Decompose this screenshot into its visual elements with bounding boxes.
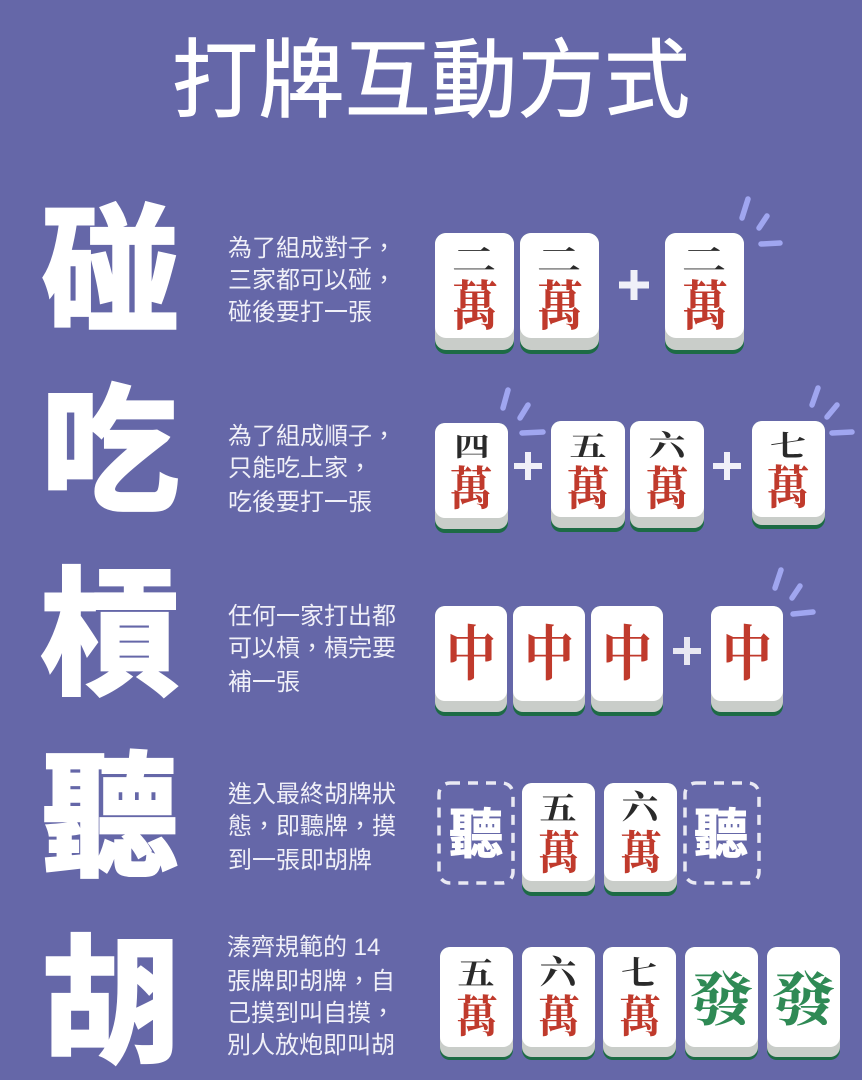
tiles: 胡 example <box>440 947 840 1060</box>
tile: 中 <box>591 606 663 716</box>
tile: 二萬: 萬 <box>537 277 583 337</box>
tiles: 聽 example <box>439 783 759 896</box>
plus sign <box>619 270 649 300</box>
tile: 發: 發 <box>690 970 753 1033</box>
tile: 五萬: 五 <box>539 792 577 826</box>
tile: 中 <box>435 606 507 716</box>
tile: 六萬: 萬 <box>646 463 688 515</box>
waiting slot: 聽 <box>694 805 748 865</box>
tile: 六萬 <box>604 783 677 896</box>
text block: 槓 description <box>228 603 396 696</box>
tiles: 碰 example <box>435 199 780 354</box>
tile: 二萬: 萬 <box>452 277 498 337</box>
text block: 胡 description: 別人放炮即叫胡 <box>227 1032 395 1059</box>
heading: 聽: 聽 <box>42 742 178 894</box>
text block: 碰 description: 碰後要打一張 <box>228 299 372 326</box>
heading: 吃: 吃 <box>41 376 179 530</box>
tile: 發 <box>767 947 840 1060</box>
tile: 五萬: 萬 <box>567 463 609 515</box>
tile: 四萬: 四 <box>454 433 490 462</box>
tile: 二萬: 二 <box>452 244 496 278</box>
text block: 聽 description: 進入最終胡牌狀 <box>228 781 396 808</box>
tile: 七萬 <box>752 421 825 529</box>
text block: 吃 description: 只能吃上家， <box>228 455 372 482</box>
tile: 六萬: 萬 <box>620 828 662 879</box>
plus sign <box>514 452 542 480</box>
text block: 胡 description <box>227 934 395 1059</box>
tile: 五萬: 萬 <box>456 993 498 1042</box>
text block: 聽 description: 到一張即胡牌 <box>228 847 372 874</box>
tile: 五萬 <box>522 783 595 896</box>
text block: 胡 description: 己摸到叫自摸， <box>227 1000 395 1027</box>
tile: 中: 中 <box>722 622 772 688</box>
waiting slot: 聽 <box>449 805 503 865</box>
tile: 中: 中 <box>602 622 652 688</box>
tile: 六萬: 萬 <box>538 993 580 1042</box>
tile: 中: 中 <box>524 622 574 688</box>
text block: 碰 description: 三家都可以碰， <box>228 267 396 294</box>
icon: sparkle <box>812 388 852 433</box>
tile: 中: 中 <box>446 622 496 688</box>
text block: 聽 description: 態，即聽牌，摸 <box>228 813 396 840</box>
tile: 二萬: 二 <box>537 244 581 278</box>
tile: 中 <box>513 606 585 716</box>
tile: 七萬: 七 <box>770 431 806 463</box>
tile: 七萬: 萬 <box>619 993 661 1042</box>
tile: 二萬: 二 <box>682 244 726 278</box>
heading: 碰: 碰 <box>42 196 180 350</box>
tile: 七萬: 七 <box>621 956 657 992</box>
tile: 二萬 <box>520 233 599 354</box>
plus sign <box>673 637 701 665</box>
plus sign <box>713 452 741 480</box>
text block: 胡 description: 張牌即胡牌，自 <box>227 968 395 995</box>
text block: 聽 description <box>228 781 396 874</box>
tile: 六萬: 六 <box>622 790 661 827</box>
tile: 發 <box>685 947 758 1060</box>
tile: 七萬 <box>603 947 676 1060</box>
icon: sparkle <box>742 199 780 244</box>
heading: 槓: 槓 <box>40 559 178 713</box>
tile: 中 <box>711 606 783 716</box>
tile: 四萬: 萬 <box>450 463 492 515</box>
tile: 六萬: 六 <box>540 955 579 992</box>
tile: 五萬: 萬 <box>538 828 580 879</box>
tile: 二萬 <box>665 233 744 354</box>
heading: 胡: 胡 <box>42 927 180 1080</box>
tile: 五萬: 五 <box>457 957 495 991</box>
icon: sparkle <box>775 570 813 614</box>
tile: 二萬: 萬 <box>682 277 728 337</box>
tile: 四萬 <box>435 423 508 533</box>
tile: 五萬 <box>440 947 513 1060</box>
text block: 吃 description: 吃後要打一張 <box>228 489 372 516</box>
tile: 六萬 <box>630 421 704 532</box>
tiles: 吃 example <box>435 388 852 533</box>
tile: 發: 發 <box>772 970 835 1033</box>
text block: 槓 description: 任何一家打出都 <box>228 603 396 630</box>
text block: 吃 description <box>228 423 396 516</box>
text block: 胡 description: 溱齊規範的 14 <box>227 934 380 961</box>
tile: 五萬 <box>551 421 625 532</box>
icon: sparkle <box>503 390 543 433</box>
text block: 碰 description: 為了組成對子， <box>228 235 396 262</box>
waiting slot <box>685 783 759 883</box>
title: 打牌互動方式 <box>172 33 690 129</box>
text block: 槓 description: 可以槓，槓完要 <box>228 635 396 662</box>
tiles: 槓 example <box>435 570 813 716</box>
text block: 槓 description: 補一張 <box>228 669 300 696</box>
tile: 五萬: 五 <box>570 432 607 463</box>
tile: 六萬 <box>522 947 595 1060</box>
waiting slot <box>439 783 513 883</box>
tile: 六萬: 六 <box>649 430 688 463</box>
tile: 七萬: 萬 <box>767 462 809 514</box>
text block: 吃 description: 為了組成順子， <box>228 423 396 450</box>
tile: 二萬 <box>435 233 514 354</box>
text block: 碰 description <box>228 235 396 326</box>
